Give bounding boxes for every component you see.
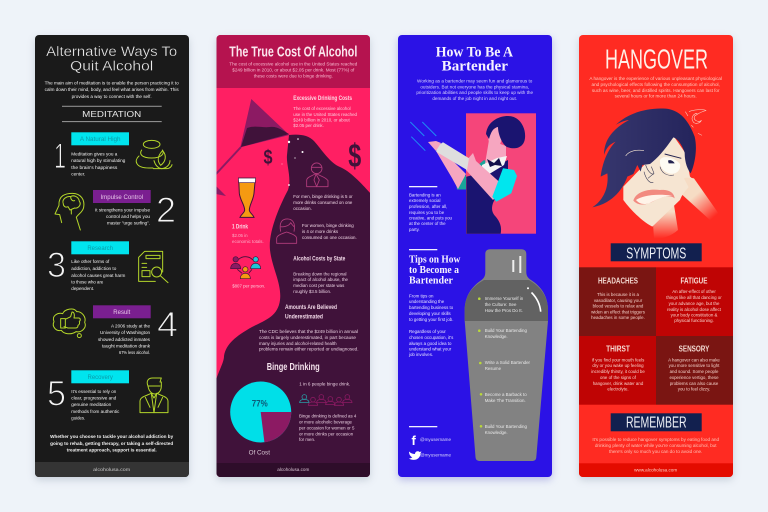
icon: small dollar: $ (264, 147, 272, 169)
step 3 label (71, 241, 129, 254)
text: binge drinking definition (299, 414, 357, 442)
intro text: provides a way to connect with the self. (72, 94, 152, 99)
intro text: several hours or for more than 24 hours. (615, 94, 697, 98)
text: bartending (409, 192, 453, 232)
card: sensory: and sound. Some people (670, 369, 719, 374)
text: tips: understanding the (409, 299, 445, 304)
text: costs by state: Breaking down the regional (293, 272, 347, 276)
intro text (416, 78, 534, 101)
text: women: is 4 or more drinks (302, 229, 339, 234)
text: tips: bartending business to (409, 305, 454, 310)
icon: woman (277, 219, 297, 243)
title: Quit Alcohol (70, 59, 153, 74)
label: of cost: Of Cost (249, 449, 270, 456)
cocktail shaker list: Become a Barback to (485, 392, 527, 397)
text: excessive drinking: $2.05 per drink. (293, 123, 324, 128)
heading: alcohol costs by state: Alcohol Costs by State (293, 256, 346, 262)
text: binge drinking definition: Binge drinking is defined as 4 (299, 414, 357, 418)
icon: man (307, 163, 328, 187)
cocktail shaker list: Resume (485, 366, 502, 371)
step 1 text: center. (71, 172, 85, 176)
step 3 text: alcohol causes great harm (71, 273, 126, 278)
text: remember (592, 437, 720, 454)
step 4 text: University of Washington (100, 330, 151, 335)
step 1 text (71, 151, 126, 176)
title (436, 45, 513, 75)
text: underestimated (259, 329, 358, 352)
text: costs by state: roughly $3.5 billion. (293, 289, 331, 294)
card: fatigue: your body constitution & (671, 312, 717, 318)
card: thirst: THIRST (606, 344, 630, 354)
step 3 text: dependent. (71, 286, 94, 291)
step 3 text: addiction, addiction to (71, 266, 117, 271)
label: 1 drink: 1 Drink (232, 223, 248, 230)
heading: meditation: MEDITATION (82, 109, 141, 119)
text: bartending: profession, after all, (409, 204, 447, 209)
social: twitter: @myusername (420, 452, 452, 458)
closing statement: treatment approach, support is essential. (67, 448, 157, 452)
heading: amounts underestimated: Underestimated (285, 314, 323, 320)
text: women: For women, binge drinking (302, 223, 354, 228)
heading: remember (611, 413, 702, 432)
step 1 text: natural high by stimulating (71, 158, 126, 163)
text: underestimated: problems remain either reported or undiagnosed. (259, 346, 358, 352)
cocktail shaker list: Make The Transition. (485, 398, 526, 403)
text: remember: It's possible to reduce hangover symptoms by eating food and (592, 437, 720, 442)
pie chart: 77% (252, 399, 268, 409)
step 4 label: Result (113, 310, 131, 316)
text: tips: to getting your first job. (409, 317, 453, 322)
step 5 text: It's essential to rely on (71, 389, 117, 394)
footer: www.alcoholusa.com (634, 468, 677, 472)
heading: tips: Tips on How (409, 254, 461, 265)
step 1 text: Meditation gives you a (71, 151, 118, 156)
intro text: and psychological effects following the consumption of alcohol, (592, 82, 720, 87)
heading: meditation (62, 106, 162, 122)
title: Alternative Ways To (46, 44, 177, 59)
text: bartending: creative, and puts you (409, 216, 453, 220)
intro text: calm down their mind, body, and feel what arises from within. This (45, 87, 180, 92)
title: HANGOVER (605, 43, 708, 74)
text: underestimated: costs is largely underestimated, in part because (259, 335, 357, 340)
intro text: The cost of excessive alcohol use in the United States reached (229, 62, 358, 67)
card: sensory: experience vertigo, these (669, 375, 719, 380)
intro text: prioritization abilities and people skills to keep up with the (416, 90, 534, 95)
title: Bartender (442, 59, 508, 75)
text: bartending: at the center of the (409, 221, 446, 226)
social: facebook: f (412, 433, 417, 448)
text: binge drinking definition: or more alcoholic beverage (299, 420, 353, 424)
step 2 label: Impulse Control (100, 194, 143, 201)
number 1: 1 (54, 137, 66, 176)
card: thirst: one of the signs of (600, 375, 637, 380)
step 5 text: genuine meditation (71, 402, 112, 407)
card: fatigue: reality is alcohol dose affect (667, 307, 722, 312)
card: headaches: blood vessels to relax and (593, 304, 644, 308)
step 3 label: Research (87, 246, 113, 252)
text: tips: understand what your (409, 346, 452, 352)
icon: beer glass (238, 178, 256, 217)
text: tips: always a good idea to (409, 341, 452, 346)
intro text: outsiders. But not everyone has the physical stamina, (420, 84, 529, 90)
step 4 text: taught meditation drank (102, 344, 151, 348)
icon: row of people (300, 395, 352, 405)
closing statement (50, 434, 174, 452)
step 5 label: Recovery (88, 375, 113, 381)
text: binge drinking definition: or more drinks per occasion (299, 432, 354, 436)
step 3 text: Like other forms of (71, 259, 110, 264)
card: fatigue: physical functioning. (674, 318, 714, 323)
cocktail shaker list: Knowledge. (485, 430, 508, 435)
intro text: such as wine, beer, and distilled spirits. Hangovers can last for (592, 88, 720, 93)
number 4: 4 (157, 306, 178, 345)
text: men (293, 194, 353, 211)
step 5 label (71, 370, 129, 383)
text: bartending: party. (409, 227, 420, 232)
card: headaches: headaches in some people. (591, 315, 645, 320)
step 4 label (93, 305, 151, 318)
step 5 text: guides. (71, 416, 85, 420)
step 5 text: methods from authentic (71, 409, 120, 414)
illustration: bartender shaking (410, 113, 536, 234)
icon: stones (136, 140, 172, 169)
heading: binge drinking: Binge Drinking (267, 362, 320, 373)
panel: true cost of alcohol (216, 35, 371, 480)
text: tips: developing your skills (409, 311, 452, 316)
step 5 text (71, 389, 120, 420)
step 3 text (71, 259, 126, 291)
step 3 text: to those who are (71, 280, 104, 284)
text: underestimated: many injuries and alcohol-related health (259, 341, 337, 346)
card: headaches: widen an effect that triggers (591, 310, 646, 314)
label: 1 drink (232, 223, 264, 244)
intro text: A hangover is the experience of various unpleasant physiological (589, 76, 722, 81)
intro text (589, 76, 722, 98)
heading: amounts underestimated (285, 305, 337, 320)
card: thirst: electrolyte. (607, 386, 629, 392)
closing statement: Whether you choose to tackle your alcohol addiction by (50, 434, 174, 439)
icon: thumbs up thought bubble (53, 309, 85, 338)
icon: document with magnifier (139, 251, 168, 283)
heading: amounts underestimated: Amounts Are Believed (285, 305, 337, 311)
step 4 text: A 2006 study at the (111, 324, 151, 328)
heading: excessive drinking costs: Excessive Drinking Costs (293, 96, 353, 102)
cocktail shaker list (465, 249, 548, 461)
panel: how to be a bartender (398, 35, 552, 480)
step 4 text (98, 324, 151, 355)
cocktail shaker list: Build Your Bartending (485, 328, 527, 333)
card: sensory (656, 336, 733, 405)
card: sensory: problems can also cause (670, 381, 719, 386)
card: headaches: HEADACHES (598, 275, 638, 285)
divider (409, 186, 437, 187)
panel: hangover (579, 35, 733, 480)
text: remember: drinking plenty of water while you're consuming alcohol, but (595, 443, 717, 448)
text: excessive drinking (293, 106, 358, 128)
social: twitter (409, 451, 452, 460)
intro text: $249 billion in 2010, or about $2.05 per drink. Most (77%) of (232, 68, 355, 73)
card: thirst: dry or you wake up feeling (592, 363, 644, 368)
text: costs by state (293, 272, 349, 294)
text: women (302, 223, 357, 240)
text: excessive drinking: The cost of excessive alcohol (293, 106, 351, 111)
closing statement: going to rehab, getting therapy, or taking a self-directed (50, 441, 174, 446)
footer: alcoholusa.com (93, 467, 130, 472)
step 1 label: A Natural High (80, 136, 121, 143)
text: tips: Regardless of your (409, 329, 446, 334)
card: sensory: A hangover can also make (668, 358, 720, 362)
card: sensory: you to feel dizzy. (678, 386, 710, 392)
icon: large dollar: $ (348, 137, 361, 174)
divider (409, 426, 437, 427)
intro text: these costs were due to binge drinking. (254, 74, 333, 79)
title: How To Be A (436, 45, 513, 61)
cocktail shaker list: Knowledge. (485, 334, 508, 339)
heading: tips (409, 254, 461, 287)
label: 1 drink: economic totals. (232, 239, 264, 244)
number 5: 5 (47, 375, 66, 414)
card: thirst: hangover, drink water and (593, 381, 644, 386)
cocktail shaker list: Immerse Yourself in (485, 296, 524, 301)
text: men: more drinks consumed on one (293, 200, 353, 205)
icon: head with brain (55, 193, 84, 230)
step 2 text: control and helps you (106, 214, 151, 219)
intro text: The main aim of meditation is to enable the person practicing it to (45, 80, 179, 86)
text: binge drinking definition: for men. (299, 437, 315, 442)
text: bartending: Bartending is an (409, 192, 441, 198)
text: costs by state: impact of alcohol abuse, the (293, 277, 349, 282)
text: binge drinking definition: per occasion for women or 5 (299, 426, 355, 430)
card: thirst: incredibly thirsty, it could be (591, 369, 645, 374)
intro text: demands of the job night in and night out. (432, 96, 517, 101)
text: men: For men, binge drinking is 5 or (293, 194, 353, 199)
card: headaches: This is because it is a (597, 292, 640, 297)
motion lines (410, 122, 436, 151)
intro text: Working as a bartender may seem fun and glamorous to (417, 78, 533, 84)
text: tips: job involves. (408, 352, 433, 357)
card: fatigue: your advance age, but the (669, 301, 720, 306)
step 2 label (93, 190, 151, 203)
card: thirst (579, 336, 656, 405)
label: 1 drink: $2.05 in (232, 233, 248, 238)
step 2 text (95, 207, 151, 226)
text: costs by state: median cost per state was (293, 283, 345, 288)
heading: symptoms: SYMPTOMS (626, 245, 686, 262)
step 2 text: master "urge surfing". (107, 221, 150, 226)
cocktail shaker list: How the Pros Do It. (485, 308, 523, 313)
step 2 text: It strengthens your impulse (95, 207, 151, 212)
step 4 text: showed addicted inmates (98, 337, 151, 342)
heading: tips: to Become a (409, 265, 459, 276)
cocktail shaker list: the Culture: See (485, 302, 517, 307)
intro text (229, 62, 358, 79)
social: facebook (412, 433, 452, 448)
text: 1 in 6: 1 in 6 people binge drink. (299, 381, 350, 386)
text: tips: From tips on (409, 294, 434, 298)
card: fatigue: FATIGUE (680, 275, 708, 285)
cocktail shaker list: Build Your Bartending (485, 424, 527, 429)
cocktail shaker list: Write a Solid Bartender (485, 360, 531, 365)
text: bartending: requires you to be (409, 210, 445, 215)
card: fatigue (656, 267, 733, 336)
heading: tips: Bartender (409, 276, 454, 287)
text: remember: there's only so much you can do to avoid one. (609, 449, 702, 454)
label: cost per person: $807 per person. (232, 284, 265, 288)
step 5 text: clear, progressive and (71, 396, 117, 400)
text: underestimated: The CDC believes that the $249 billion in annual (259, 329, 358, 334)
card: headaches: vasodilator, causing your (594, 298, 643, 303)
text: excessive drinking: use in the United States reached (293, 112, 358, 117)
divider (409, 249, 437, 250)
heading: symptoms (611, 243, 702, 262)
intro text (45, 80, 180, 99)
title: The True Cost Of Alcohol (229, 44, 357, 61)
icon: cocktail glass (216, 99, 289, 196)
illustration: hungover face (592, 108, 720, 239)
footer: alcoholusa.com (277, 467, 309, 472)
card: headaches (579, 267, 656, 336)
title (46, 44, 177, 74)
droplets (281, 138, 304, 186)
text: tips (408, 294, 454, 357)
text: women: consumed on one occasion. (302, 235, 357, 240)
card: fatigue: An after-effect of other (672, 289, 716, 294)
card: fatigue: things like all that dancing or (666, 295, 722, 300)
card: thirst: If you find your mouth feels (592, 358, 645, 362)
step 1 label (71, 132, 129, 145)
step 4 text: 67% less alcohol. (119, 350, 150, 355)
number 2: 2 (156, 191, 176, 230)
text: excessive drinking: $249 billion in 2010, or about (293, 118, 350, 122)
heading: remember: REMEMBER (626, 415, 687, 432)
card: sensory: you more sensitive to light (669, 363, 720, 368)
number 3: 3 (47, 246, 66, 285)
social: facebook: @myusername (420, 437, 452, 442)
panel: alternative ways to quit alcohol (35, 35, 189, 480)
text: men: occasion. (293, 206, 312, 211)
card: sensory: SENSORY (679, 344, 710, 354)
pie chart (230, 382, 291, 442)
icon: professional man (140, 378, 168, 413)
text: bartending: extremely social (409, 198, 441, 203)
text: tips: chosen occupation, it's (409, 335, 454, 340)
step 1 text: the brain's happiness (71, 165, 118, 170)
icon: people group (231, 257, 261, 279)
